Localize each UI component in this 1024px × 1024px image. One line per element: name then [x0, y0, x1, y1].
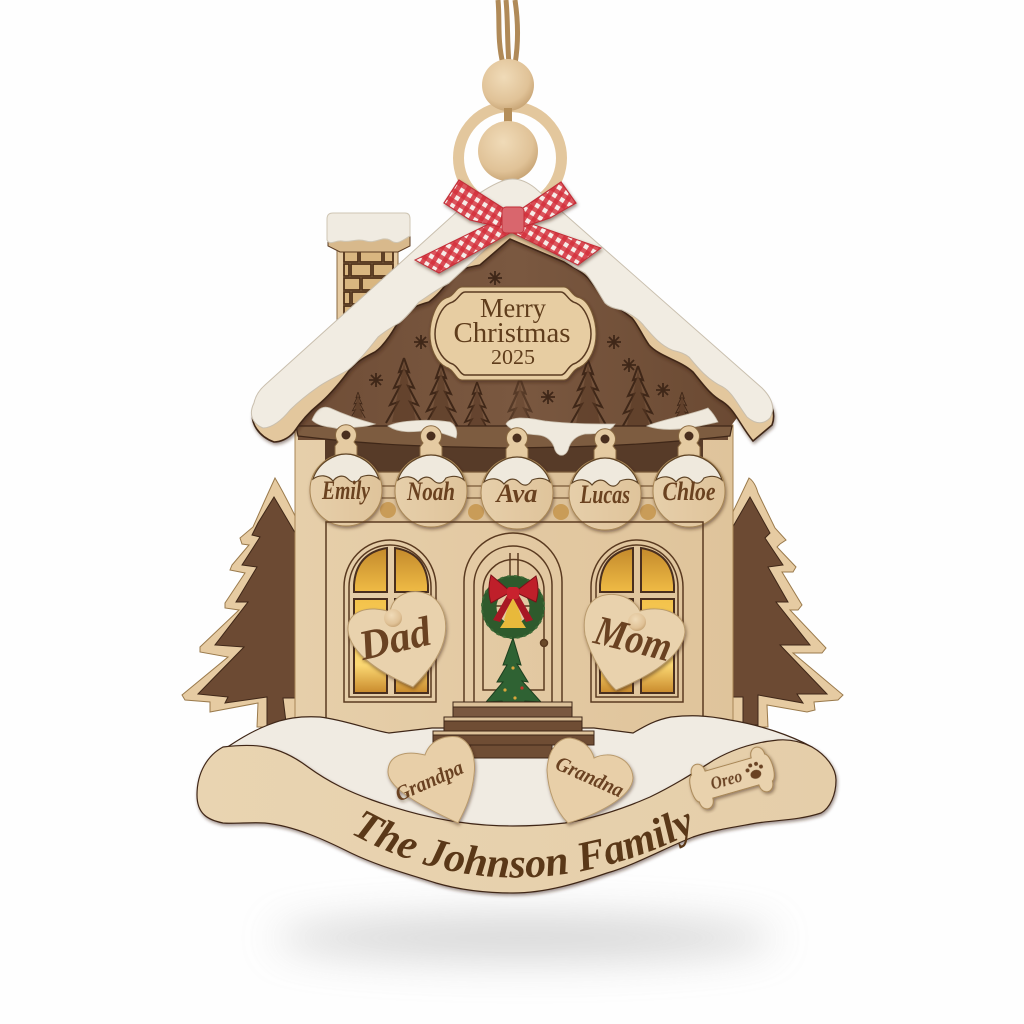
right tree	[731, 478, 843, 727]
heart: Grandpa	[388, 737, 474, 823]
interior behind ornaments	[325, 438, 703, 522]
chimney	[327, 213, 410, 325]
hanging ring	[458, 106, 562, 210]
ornament: Emily	[310, 425, 382, 526]
heart: Grandna: Grandna	[552, 751, 628, 802]
bone tag: Oreo: Oreo	[708, 766, 744, 794]
gable with engraved forest	[285, 215, 750, 450]
front steps	[433, 702, 594, 758]
wooden beads	[478, 59, 538, 181]
ornament: Chloe	[653, 426, 725, 527]
bow	[415, 180, 601, 273]
heart: Dad: Dad	[354, 609, 436, 670]
plaque: Merry Christmas 2025: Merry	[480, 293, 546, 323]
house body	[295, 425, 733, 737]
ornament: Chloe: Chloe	[662, 477, 716, 506]
front wall engraved panel	[326, 522, 703, 725]
beam snow patches	[312, 407, 718, 455]
heart: Dad	[348, 592, 446, 687]
ornament: Emily: Emily	[321, 476, 370, 505]
heart: Grandna	[547, 738, 633, 823]
ornament: Noah: Noah	[406, 477, 455, 506]
jute twine	[498, 0, 518, 64]
left window	[344, 540, 436, 702]
name banner	[197, 740, 836, 893]
plaque: Merry Christmas 2025: Christmas	[454, 317, 570, 349]
plaque: Merry Christmas 2025	[430, 287, 596, 380]
roof under layer	[252, 184, 774, 442]
ornament: Lucas: Lucas	[579, 480, 630, 509]
ornament: Ava	[481, 428, 553, 529]
wreath with bow and bell	[482, 575, 544, 638]
ground snow	[226, 716, 812, 830]
right window	[591, 540, 683, 702]
left tree	[182, 478, 297, 730]
heart: Mom	[584, 594, 685, 690]
family name: The Johnson Family	[353, 810, 690, 878]
eave beam	[296, 426, 732, 448]
door	[464, 533, 562, 702]
plaque: Merry Christmas 2025: 2025	[491, 345, 535, 369]
heart: Mom: Mom	[589, 607, 677, 671]
ornament: Noah	[395, 426, 467, 527]
heart: Grandpa: Grandpa	[391, 755, 467, 806]
ground shadow	[275, 916, 775, 960]
roof snow	[251, 179, 773, 428]
door tree	[486, 638, 541, 707]
bone tag: Oreo	[685, 744, 779, 812]
ornament: Ava: Ava	[494, 479, 538, 508]
ornament: Lucas	[569, 429, 641, 530]
